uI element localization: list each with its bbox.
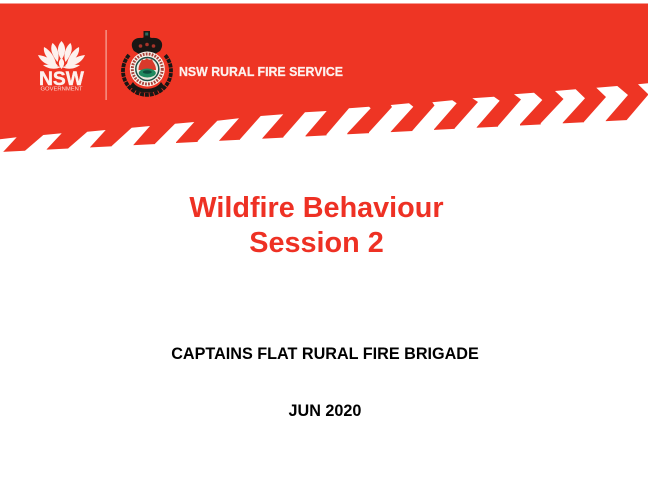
title: Wildfire Behaviour	[189, 192, 444, 224]
logo divider	[106, 30, 107, 100]
header banner	[0, 4, 648, 152]
date: JUN 2020	[289, 402, 361, 420]
title	[189, 192, 444, 259]
organisation name: NSW RURAL FIRE SERVICE	[179, 64, 343, 79]
NSW Government logo	[38, 41, 85, 92]
icon: waratah flower	[38, 41, 85, 69]
title: Session 2	[249, 227, 384, 259]
NSW Rural Fire Service crest	[123, 31, 171, 95]
crest wreath	[123, 55, 171, 95]
logo wordmark GOVERNMENT: GOVERNMENT	[40, 86, 82, 92]
crest centre	[136, 58, 159, 80]
brigade name: CAPTAINS FLAT RURAL FIRE BRIGADE	[171, 345, 479, 363]
crest seal ring	[130, 52, 165, 86]
crest scroll	[130, 82, 164, 93]
red banner	[0, 4, 648, 152]
crest crown	[132, 31, 162, 54]
logo wordmark NSW: NSW	[39, 68, 85, 90]
hazard stripes	[0, 83, 648, 153]
